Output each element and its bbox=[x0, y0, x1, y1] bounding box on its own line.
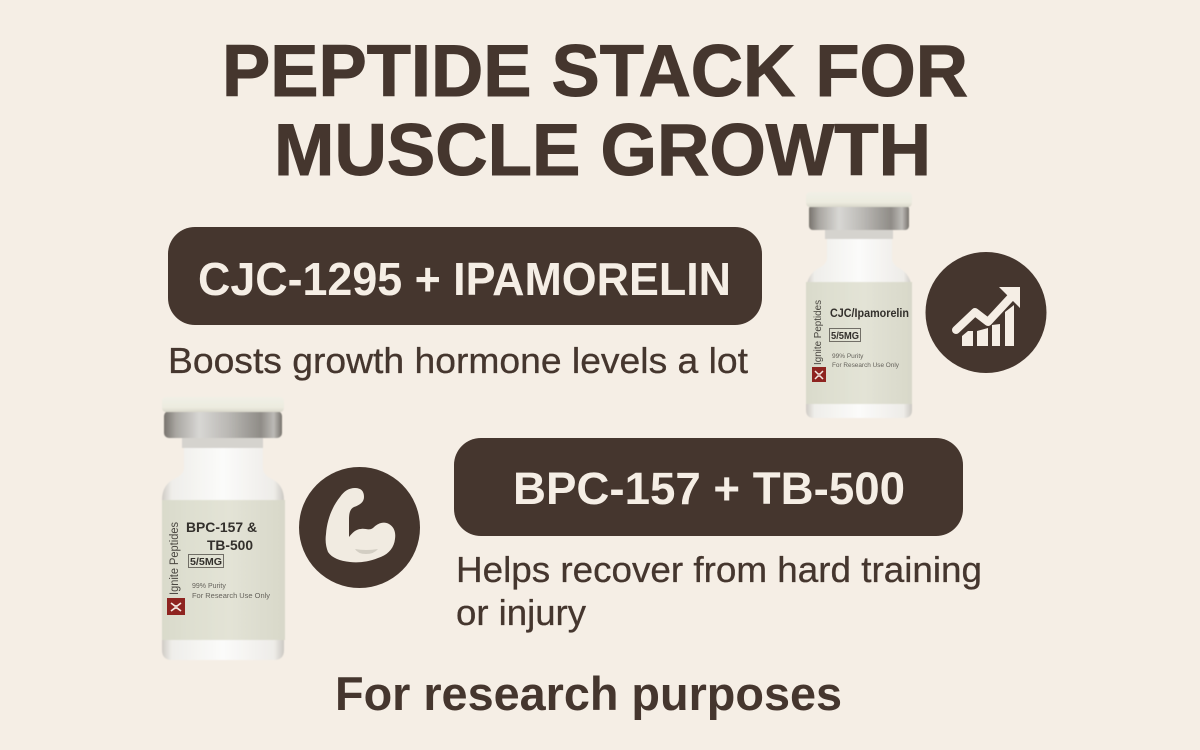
text: CJC-1295 benefit: Boosts growth hormone levels a lot bbox=[168, 340, 748, 381]
icon: growth chart bbox=[926, 252, 1046, 373]
text: BPC-157 benefit bbox=[456, 549, 982, 633]
vial: CJC/Ipamorelin: Ignite Peptides bbox=[812, 300, 824, 365]
vial: BPC-157 & TB-500: Ignite Peptides bbox=[169, 522, 181, 595]
title: PEPTIDE STACK FOR bbox=[222, 31, 968, 112]
vial glass bbox=[806, 192, 912, 418]
panel: CJC-1295 + Ipamorelin heading pill bbox=[168, 227, 762, 325]
vial: BPC-157 & TB-500: 99% Purity bbox=[192, 583, 226, 590]
vial: CJC/Ipamorelin: CJC/Ipamorelin bbox=[830, 308, 909, 320]
text: BPC-157 benefit: or injury bbox=[456, 592, 586, 633]
icon: brand logo bbox=[167, 598, 185, 615]
vial: CJC/Ipamorelin: 5/5MG bbox=[831, 331, 859, 342]
panel: BPC-157 + TB-500 heading pill bbox=[454, 438, 963, 536]
vial: BPC-157 & TB-500: BPC-157 & bbox=[186, 519, 257, 535]
vial: BPC-157 & TB-500: For Research Use Only bbox=[192, 593, 271, 600]
vial: BPC-157 & TB-500: TB-500 bbox=[207, 537, 253, 553]
title bbox=[222, 31, 968, 191]
vial glass bbox=[162, 397, 285, 660]
panel: CJC-1295 + Ipamorelin heading pill: CJC-1295 + IPAMORELIN bbox=[198, 253, 731, 305]
vial: CJC/Ipamorelin bbox=[806, 192, 912, 418]
vial: CJC/Ipamorelin: 99% Purity bbox=[832, 353, 864, 360]
title: MUSCLE GROWTH bbox=[274, 110, 931, 191]
panel: BPC-157 + TB-500 heading pill: BPC-157 + TB-500 bbox=[513, 463, 905, 514]
footer note: For research purposes bbox=[335, 667, 842, 720]
icon: flexed muscle bbox=[299, 467, 420, 588]
vial: CJC/Ipamorelin: For Research Use Only bbox=[832, 362, 900, 369]
icon: brand logo bbox=[812, 367, 826, 382]
text: BPC-157 benefit: Helps recover from hard training bbox=[456, 549, 982, 590]
vial: BPC-157 & TB-500 bbox=[162, 397, 285, 660]
vial: BPC-157 & TB-500: 5/5MG bbox=[190, 556, 222, 568]
